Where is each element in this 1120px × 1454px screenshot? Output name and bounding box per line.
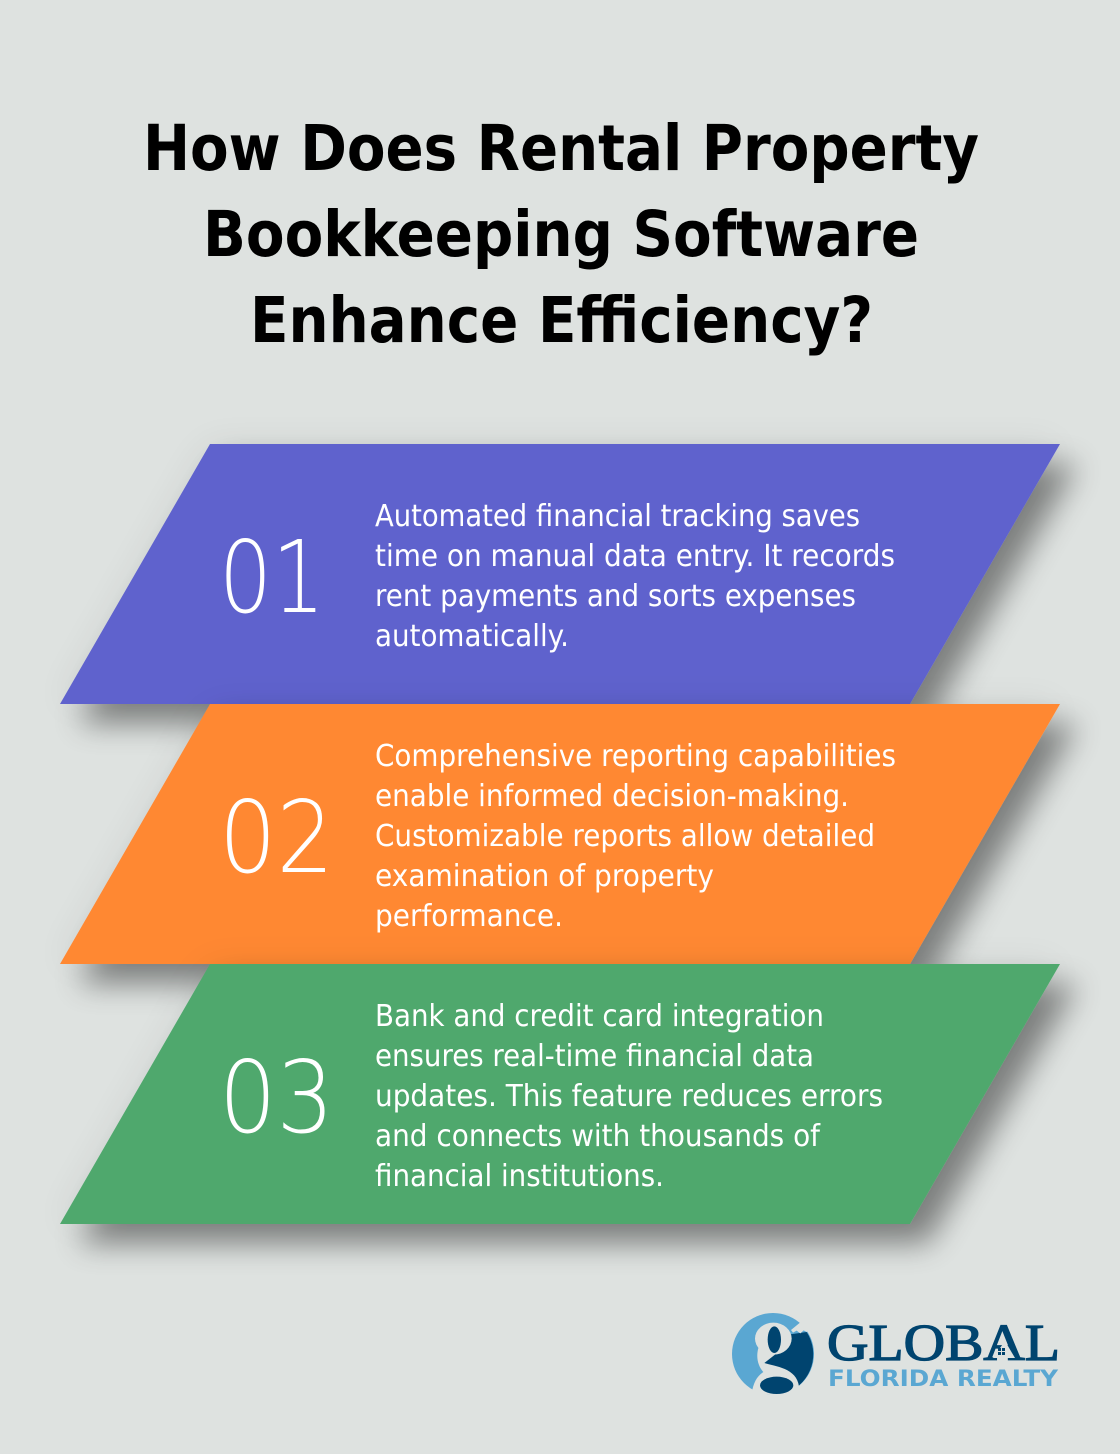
text: step 02 description: enable informed decision-making. bbox=[375, 779, 849, 814]
icon: house window in the A bbox=[993, 1341, 1015, 1358]
panel: step 02 bbox=[60, 704, 1060, 964]
text: step 02 description: examination of property bbox=[375, 859, 714, 894]
logo: Global Florida Realty bbox=[732, 1313, 1060, 1397]
number 01: 01 bbox=[219, 519, 325, 636]
text: step 01 description: time on manual data entry. It records bbox=[375, 539, 895, 574]
title bbox=[143, 112, 979, 357]
orange parallelogram bbox=[60, 704, 1060, 964]
icon: g roundel bbox=[732, 1313, 814, 1397]
green parallelogram bbox=[60, 964, 1060, 1224]
text: step 01 description: Automated financial tracking saves bbox=[375, 499, 860, 534]
wordmark: GLOBAL: GLOBAL bbox=[827, 1315, 1060, 1372]
panel: step 03 bbox=[60, 964, 1060, 1224]
text: step 03 description: financial institutions. bbox=[375, 1159, 664, 1194]
number 03: 03 bbox=[219, 1039, 334, 1156]
text: step 01 description: automatically. bbox=[375, 619, 569, 654]
purple parallelogram bbox=[60, 444, 1060, 704]
panel: step 01 bbox=[60, 444, 1060, 704]
text: step 02 description: Comprehensive reporting capabilities bbox=[375, 739, 896, 774]
title: Enhance Efficiency? bbox=[250, 284, 873, 357]
text: step 03 description bbox=[375, 999, 883, 1194]
text: step 01 description bbox=[375, 499, 895, 654]
text: step 02 description: Customizable reports allow detailed bbox=[375, 819, 875, 854]
text: step 02 description bbox=[375, 739, 896, 934]
text: step 03 description: updates. This feature reduces errors bbox=[375, 1079, 883, 1114]
number 02: 02 bbox=[219, 779, 334, 896]
text: step 03 description: Bank and credit card integration bbox=[375, 999, 824, 1034]
wordmark: FLORIDA REALTY: FLORIDA REALTY bbox=[828, 1367, 1059, 1392]
title: Bookkeeping Software bbox=[203, 198, 919, 271]
text: step 02 description: performance. bbox=[375, 899, 563, 934]
title: How Does Rental Property bbox=[143, 112, 979, 185]
text: step 03 description: ensures real-time financial data bbox=[375, 1039, 814, 1074]
text: step 01 description: rent payments and sorts expenses bbox=[375, 579, 856, 614]
text: step 03 description: and connects with thousands of bbox=[375, 1119, 821, 1154]
